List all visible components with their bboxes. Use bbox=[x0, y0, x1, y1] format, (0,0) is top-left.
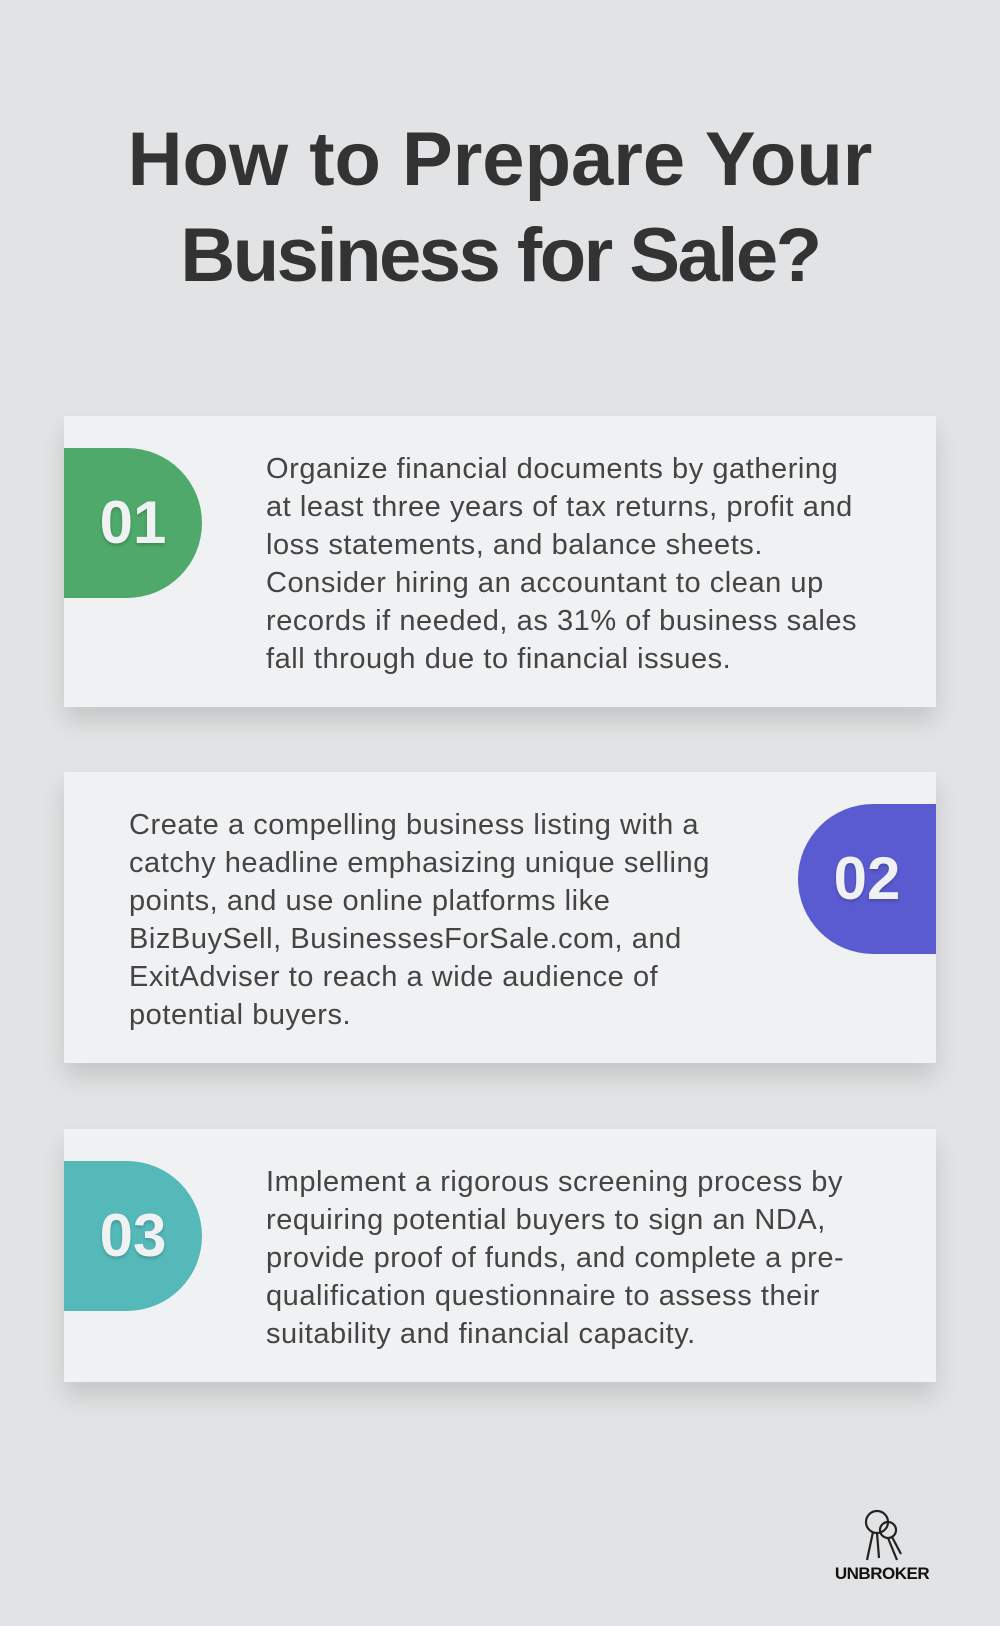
text: step 3: provide proof of funds, and complete a pre- bbox=[266, 1242, 844, 1274]
text: step 3: suitability and financial capacity. bbox=[266, 1318, 696, 1350]
badge: 01: 01 bbox=[100, 489, 166, 556]
logo: unbroker bbox=[835, 1510, 930, 1583]
text: step 1: at least three years of tax returns, profit and bbox=[266, 491, 853, 523]
text: step 2: potential buyers. bbox=[129, 999, 351, 1031]
text: step 1: fall through due to financial issues. bbox=[266, 643, 731, 675]
text: step 2: ExitAdviser to reach a wide audience of bbox=[129, 961, 658, 993]
badge: 01 bbox=[64, 448, 202, 598]
text: step 3: Implement a rigorous screening process by bbox=[266, 1166, 843, 1198]
text: step 3 bbox=[266, 1166, 844, 1350]
text: step 2 bbox=[129, 809, 710, 1031]
text: step 2: Create a compelling business listing with a bbox=[129, 809, 699, 841]
title: Business for Sale? bbox=[180, 213, 820, 298]
badge: 03 bbox=[64, 1161, 202, 1311]
badge: 03: 03 bbox=[100, 1202, 166, 1269]
icon: keys bbox=[864, 1510, 902, 1560]
badge: 02 bbox=[798, 804, 936, 954]
text: step 3: requiring potential buyers to sign an NDA, bbox=[266, 1204, 826, 1236]
text: step 1: records if needed, as 31% of business sales bbox=[266, 605, 857, 637]
text: step 1: Consider hiring an accountant to clean up bbox=[266, 567, 824, 599]
text: step 2: BizBuySell, BusinessesForSale.com, and bbox=[129, 923, 682, 955]
badge: 02: 02 bbox=[834, 845, 900, 912]
panel: step 1 bbox=[64, 416, 936, 707]
title bbox=[128, 117, 872, 298]
text: step 1: loss statements, and balance sheets. bbox=[266, 529, 763, 561]
logo: unbroker: UNBROKER bbox=[835, 1564, 929, 1583]
text: step 3: qualification questionnaire to assess their bbox=[266, 1280, 820, 1312]
text: step 1 bbox=[266, 453, 857, 675]
panel: step 2 bbox=[64, 772, 936, 1063]
text: step 2: catchy headline emphasizing unique selling bbox=[129, 847, 710, 879]
panel: step 3 bbox=[64, 1129, 936, 1382]
title: How to Prepare Your bbox=[128, 117, 872, 202]
text: step 2: points, and use online platforms like bbox=[129, 885, 610, 917]
text: step 1: Organize financial documents by gathering bbox=[266, 453, 838, 485]
